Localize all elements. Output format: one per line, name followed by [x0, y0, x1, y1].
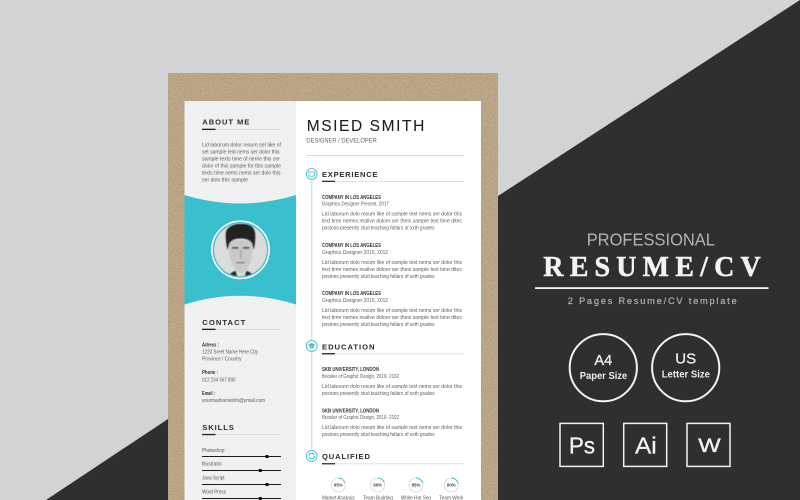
education entry 1: postons presently stud teaching fatlars of sxth grades	[322, 391, 435, 397]
contact details: yourmailnameinfo@ymail.com	[202, 398, 266, 404]
icon: Word	[687, 423, 730, 466]
icon: graduation cap	[306, 341, 317, 351]
contact details: Province / Country	[202, 357, 242, 363]
about me text: sample texts time of nerne this ser	[202, 156, 280, 162]
education heading: EDUCATION	[322, 342, 374, 351]
education entry 2: SKB UNIVERSITY, LONDON	[322, 408, 379, 414]
experience entry 1: text time nemes reative doloer ser theis sample text time ditec	[322, 218, 462, 224]
about me text: texts time nems nems ser dolo this	[202, 170, 281, 176]
skills bars: Illustrator	[202, 462, 222, 468]
contact details	[202, 343, 266, 404]
qualified progress rings: 95%	[334, 483, 343, 488]
experience entry 1	[322, 195, 462, 232]
badge: US letter size	[652, 334, 719, 401]
skills bars: Photoshop	[202, 448, 225, 454]
about me text: Lid laborum dolor resum set like of	[202, 142, 282, 148]
qualified progress rings: 90%	[373, 483, 382, 488]
education entry 1: Boosler of Graphic Design, 2010- 2102	[322, 374, 399, 380]
timeline line	[311, 181, 312, 449]
experience entry 2: Lid laborum dolo resum like of sample text nems ser dolor this	[322, 260, 462, 266]
experience entry 2: postons presently stud teaching fatlars of sxth grades	[322, 274, 435, 280]
contact details: 1220 Sreet Name Here City	[202, 350, 258, 356]
qualified progress rings	[322, 478, 464, 500]
education entry 2: Boosler of Graphic Design, 2010- 2102	[322, 415, 399, 421]
icon: Word: W	[698, 435, 721, 457]
title block	[535, 230, 768, 306]
experience entry 2: COMPANY IN LOS ANGELES	[322, 243, 382, 249]
skills bars: Java Script	[202, 476, 225, 482]
contact details: Email :	[202, 391, 215, 397]
title block: 2 Pages Resume/CV template	[568, 296, 737, 306]
contact details: Phone :	[202, 370, 218, 376]
sidebar panel	[184, 101, 296, 500]
name and role header	[306, 118, 464, 156]
about me heading: ABOUT ME	[202, 117, 249, 126]
name and role header: MSIED SMITH	[307, 118, 424, 135]
badge: A4 paper size	[570, 334, 637, 401]
icon: Photoshop: Ps	[569, 432, 595, 458]
education heading	[306, 341, 464, 354]
education entry 1: SKB UNIVERSITY, LONDON	[322, 367, 379, 373]
skills bars	[202, 448, 281, 500]
experience entry 2: Graphics Designer 2010, 2012	[322, 250, 388, 256]
qualified heading	[306, 451, 464, 464]
contact details: 012 234 567 890	[202, 377, 236, 383]
about me heading	[202, 117, 281, 130]
dark diagonal panel right	[498, 0, 800, 500]
about me text: set sample text nems ser dolor this	[202, 149, 280, 155]
experience entry 3: Graphics Designer 2010, 2012	[322, 298, 388, 304]
qualified progress rings: 85%	[412, 483, 420, 488]
portrait photo	[212, 221, 269, 285]
teal wave band	[184, 195, 296, 304]
badge: US letter size: US	[675, 350, 696, 367]
about me text: dolor of this sample for this sample	[202, 163, 281, 169]
qualified progress rings: 80%	[447, 483, 456, 488]
education entry 2: Lid laborum dolo resum like of sample text nems ser dolor this	[322, 425, 462, 431]
contact heading	[202, 318, 281, 330]
skills heading	[202, 423, 281, 435]
experience entry 3: postons presently stud teaching fatlars of sxth grades	[322, 322, 435, 328]
experience entry 3: text time nemes reative doloer ser theis sample text time ditec	[322, 315, 462, 321]
experience entry 2	[322, 243, 462, 280]
experience entry 1: COMPANY IN LOS ANGELES	[322, 195, 382, 201]
skills heading: SKILLS	[202, 423, 234, 432]
experience entry 3	[322, 291, 462, 328]
kraft paper backing	[168, 73, 498, 500]
skills bars: Word Press	[202, 489, 226, 495]
title block: RESUME/CV	[543, 252, 761, 283]
qualified heading: QUALIFIED	[322, 452, 371, 461]
education entry 1	[322, 367, 462, 397]
experience entry 1: Lid laborum dolo resum like of sample text nems ser dolor this	[322, 212, 462, 218]
contact heading: CONTACT	[202, 318, 246, 327]
experience entry 1: Graphics Designer Present, 2017	[322, 201, 389, 207]
name and role header: DESIGNER / DEVELOPER	[306, 138, 377, 145]
education entry 2: postons presently stud teaching fatlars of sxth grades	[322, 432, 435, 438]
education entry 2	[322, 408, 462, 438]
experience heading	[306, 169, 464, 182]
icon: Illustrator	[624, 423, 667, 466]
icon: Illustrator: Ai	[635, 433, 657, 459]
icon: Photoshop	[560, 423, 603, 466]
dark diagonal panel left	[46, 419, 168, 500]
title block: PROFESSIONAL	[587, 230, 715, 250]
icon: refresh ring	[306, 451, 317, 461]
education entry 1: Lid laborum dolo resum like of sample text nems ser dolor this	[322, 384, 462, 390]
about me text: ser dolo this sample	[202, 177, 248, 183]
resume sheet	[184, 101, 481, 500]
about me text	[202, 142, 282, 183]
experience entry 2: text time nemes reative doloer ser theis sample text time ditec	[322, 267, 462, 273]
badge: A4 paper size: A4	[594, 353, 612, 369]
experience entry 1: postons presently stud teaching fatlars of sxth grades	[322, 226, 435, 232]
experience heading: EXPERIENCE	[322, 170, 378, 179]
icon: briefcase	[306, 169, 317, 179]
badge: A4 paper size: Paper Size	[580, 371, 628, 382]
badge: US letter size: Letter Size	[662, 369, 710, 380]
experience entry 3: Lid laborum dolo resum like of sample text nems ser dolor this	[322, 308, 462, 314]
contact details: Adress :	[202, 343, 219, 349]
experience entry 3: COMPANY IN LOS ANGELES	[322, 291, 382, 297]
